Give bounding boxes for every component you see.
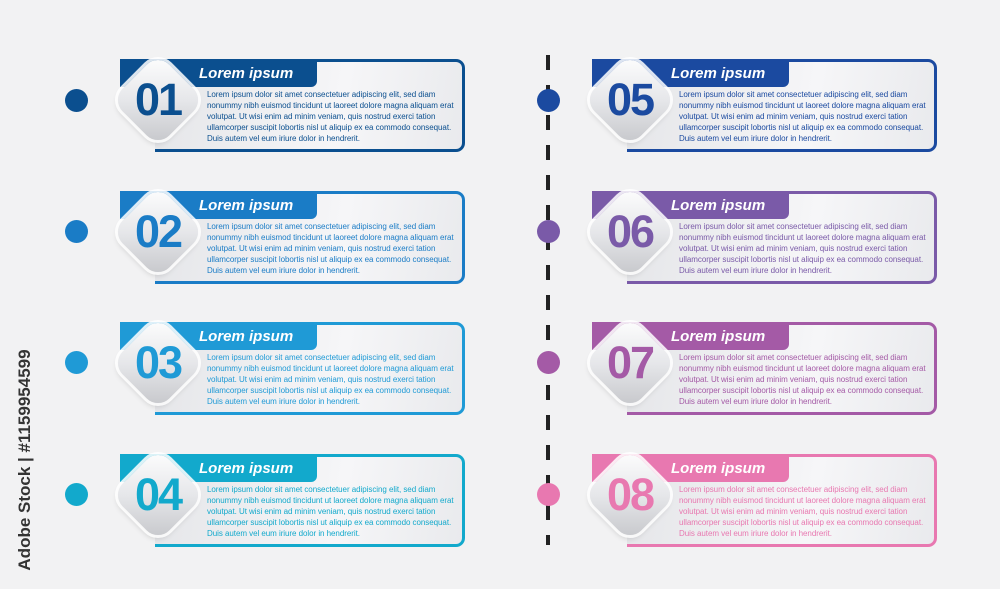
dot 04 bbox=[65, 483, 88, 506]
dot 05 bbox=[537, 89, 560, 112]
panel 02: Lorem ipsum bbox=[199, 197, 293, 214]
panel 05: 05 bbox=[607, 74, 653, 125]
dot 01 bbox=[65, 89, 88, 112]
panel 03: Lorem ipsum bbox=[199, 328, 293, 345]
dashed timeline bbox=[546, 55, 550, 545]
watermark text: Adobe Stock | #1159954599 bbox=[15, 349, 34, 571]
panel 01: Lorem ipsum bbox=[199, 65, 293, 82]
panel 02 bbox=[115, 189, 465, 284]
panel 01 bbox=[115, 57, 465, 152]
panel 03: Lorem ipsum dolor sit amet consectetuer adipiscing elit, sed diam nonummy nibh euismod tincidunt ut laoreet dolore magna aliquam erat volutpat. Ut wisi enim ad minim veniam, quis nostrud exerci tation ullamcorper suscipit lobortis nisl ut aliquip ex ea commodo consequat. Duis autem vel eum iriure dolor in hendrerit. bbox=[207, 353, 454, 406]
panel 03 bbox=[115, 320, 465, 415]
panel 06: 06 bbox=[607, 206, 653, 257]
panel 06: Lorem ipsum bbox=[671, 197, 765, 214]
dot 07 bbox=[537, 351, 560, 374]
panel 01: 01 bbox=[135, 74, 181, 125]
dot 02 bbox=[65, 220, 88, 243]
panel 04: Lorem ipsum bbox=[199, 460, 293, 477]
dot 06 bbox=[537, 220, 560, 243]
panel 01: Lorem ipsum dolor sit amet consectetuer adipiscing elit, sed diam nonummy nibh euismod tincidunt ut laoreet dolore magna aliquam erat volutpat. Ut wisi enim ad minim veniam, quis nostrud exerci tation ullamcorper suscipit lobortis nisl ut aliquip ex ea commodo consequat. Duis autem vel eum iriure dolor in hendrerit. bbox=[207, 90, 454, 143]
panel 07 bbox=[587, 320, 937, 415]
panel 08: Lorem ipsum bbox=[671, 460, 765, 477]
panel 02: Lorem ipsum dolor sit amet consectetuer adipiscing elit, sed diam nonummy nibh euismod tincidunt ut laoreet dolore magna aliquam erat volutpat. Ut wisi enim ad minim veniam, quis nostrud exerci tation ullamcorper suscipit lobortis nisl ut aliquip ex ea commodo consequat. Duis autem vel eum iriure dolor in hendrerit. bbox=[207, 222, 454, 275]
panel 05: Lorem ipsum bbox=[671, 65, 765, 82]
panel 07: Lorem ipsum dolor sit amet consectetuer adipiscing elit, sed diam nonummy nibh euismod tincidunt ut laoreet dolore magna aliquam erat volutpat. Ut wisi enim ad minim veniam, quis nostrud exerci tation ullamcorper suscipit lobortis nisl ut aliquip ex ea commodo consequat. Duis autem vel eum iriure dolor in hendrerit. bbox=[679, 353, 926, 406]
panel 04: Lorem ipsum dolor sit amet consectetuer adipiscing elit, sed diam nonummy nibh euismod tincidunt ut laoreet dolore magna aliquam erat volutpat. Ut wisi enim ad minim veniam, quis nostrud exerci tation ullamcorper suscipit lobortis nisl ut aliquip ex ea commodo consequat. Duis autem vel eum iriure dolor in hendrerit. bbox=[207, 485, 454, 538]
panel 05 bbox=[587, 57, 937, 152]
panel 04 bbox=[115, 452, 465, 547]
panel 07: 07 bbox=[607, 337, 653, 388]
dot 08 bbox=[537, 483, 560, 506]
panel 08: 08 bbox=[607, 469, 653, 520]
panel 05: Lorem ipsum dolor sit amet consectetuer adipiscing elit, sed diam nonummy nibh euismod tincidunt ut laoreet dolore magna aliquam erat volutpat. Ut wisi enim ad minim veniam, quis nostrud exerci tation ullamcorper suscipit lobortis nisl ut aliquip ex ea commodo consequat. Duis autem vel eum iriure dolor in hendrerit. bbox=[679, 90, 926, 143]
panel 07: Lorem ipsum bbox=[671, 328, 765, 345]
panel 04: 04 bbox=[135, 469, 181, 520]
panel 06 bbox=[587, 189, 937, 284]
panel 06: Lorem ipsum dolor sit amet consectetuer adipiscing elit, sed diam nonummy nibh euismod tincidunt ut laoreet dolore magna aliquam erat volutpat. Ut wisi enim ad minim veniam, quis nostrud exerci tation ullamcorper suscipit lobortis nisl ut aliquip ex ea commodo consequat. Duis autem vel eum iriure dolor in hendrerit. bbox=[679, 222, 926, 275]
dot 03 bbox=[65, 351, 88, 374]
panel 02: 02 bbox=[135, 206, 181, 257]
panel 08 bbox=[587, 452, 937, 547]
panel 03: 03 bbox=[135, 337, 181, 388]
panel 08: Lorem ipsum dolor sit amet consectetuer adipiscing elit, sed diam nonummy nibh euismod tincidunt ut laoreet dolore magna aliquam erat volutpat. Ut wisi enim ad minim veniam, quis nostrud exerci tation ullamcorper suscipit lobortis nisl ut aliquip ex ea commodo consequat. Duis autem vel eum iriure dolor in hendrerit. bbox=[679, 485, 926, 538]
